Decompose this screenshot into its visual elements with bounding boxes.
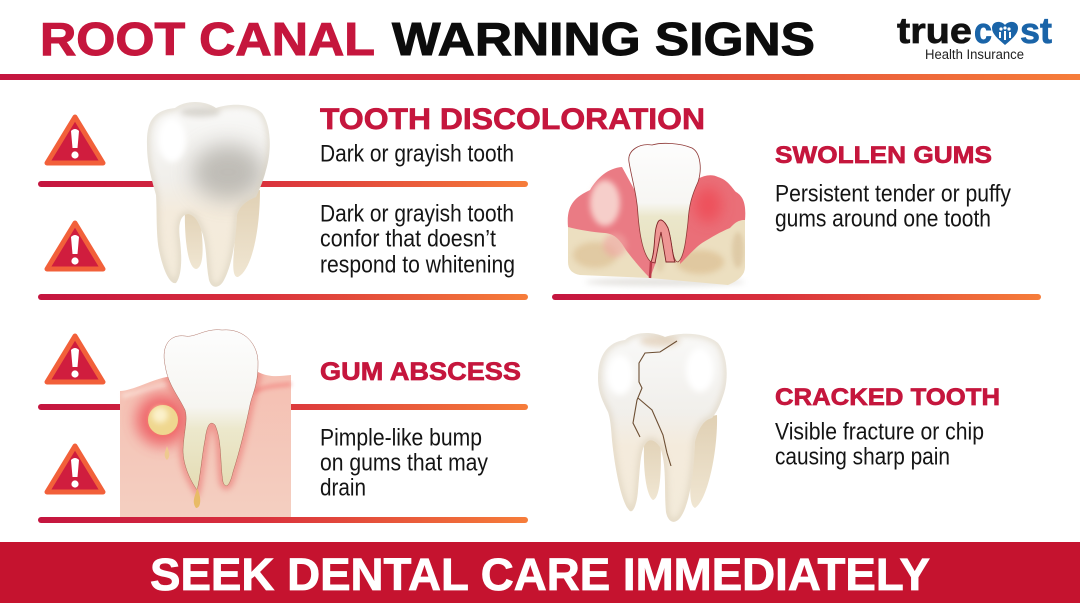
text: swollen gums description: gums around one tooth xyxy=(775,206,991,232)
icon: warning triangle 4 xyxy=(47,446,103,492)
panel: cracked tooth xyxy=(598,333,1000,522)
text: cracked tooth description xyxy=(775,418,984,470)
icon: warning triangle 2 xyxy=(47,223,103,269)
logo: truecost health insurance: Health Insurance xyxy=(925,47,1024,62)
heading: cracked tooth: CRACKED TOOTH xyxy=(775,384,1000,411)
heading: gum abscess: GUM ABSCESS xyxy=(320,358,521,386)
illustration: cracked tooth xyxy=(598,333,727,522)
text: gum abscess description xyxy=(320,424,489,502)
text: cracked tooth description: Visible fracture or chip xyxy=(775,418,984,446)
panel: swollen gums xyxy=(552,142,1041,300)
title: WARNING SIGNS xyxy=(392,13,815,65)
icon: warning triangle 3 xyxy=(47,336,103,382)
text: dark or grayish tooth: Dark or grayish tooth xyxy=(320,140,514,168)
illustration: abscess on gum xyxy=(120,330,291,517)
panel: gum abscess xyxy=(38,330,528,523)
text: colour does not respond: respond to whitening xyxy=(320,252,515,278)
heading: tooth discoloration: TOOTH DISCOLORATION xyxy=(320,103,705,136)
logo: truecost health insurance: true xyxy=(897,10,972,51)
logo: truecost health insurance: c xyxy=(974,10,992,51)
footer banner xyxy=(0,542,1080,603)
title: ROOT CANAL xyxy=(40,13,375,65)
footer call to action: SEEK DENTAL CARE IMMEDIATELY xyxy=(150,549,930,600)
title xyxy=(40,13,815,65)
text: cracked tooth description: causing sharp pain xyxy=(775,444,950,470)
header gradient rule xyxy=(0,74,1080,80)
text: colour does not respond: confor that doesn’t xyxy=(320,226,496,252)
icon: warning triangle 1 xyxy=(47,117,103,163)
text: gum abscess description: on gums that may xyxy=(320,450,489,476)
text: swollen gums description xyxy=(775,180,1012,232)
text: gum abscess description: drain xyxy=(320,474,366,502)
heading: swollen gums: SWOLLEN GUMS xyxy=(775,142,992,169)
text: gum abscess description: Pimple-like bump xyxy=(320,424,482,452)
text: colour does not respond xyxy=(320,200,515,278)
logo: truecost health insurance: st xyxy=(1020,10,1052,51)
text: colour does not respond: Dark or grayish tooth xyxy=(320,200,514,228)
text: swollen gums description: Persistent tender or puffy xyxy=(775,180,1012,208)
illustration: discolored tooth xyxy=(147,102,270,287)
logo: truecost health insurance xyxy=(897,10,1052,62)
illustration: swollen gum cross section xyxy=(568,143,745,286)
panel: tooth discoloration xyxy=(38,102,705,300)
